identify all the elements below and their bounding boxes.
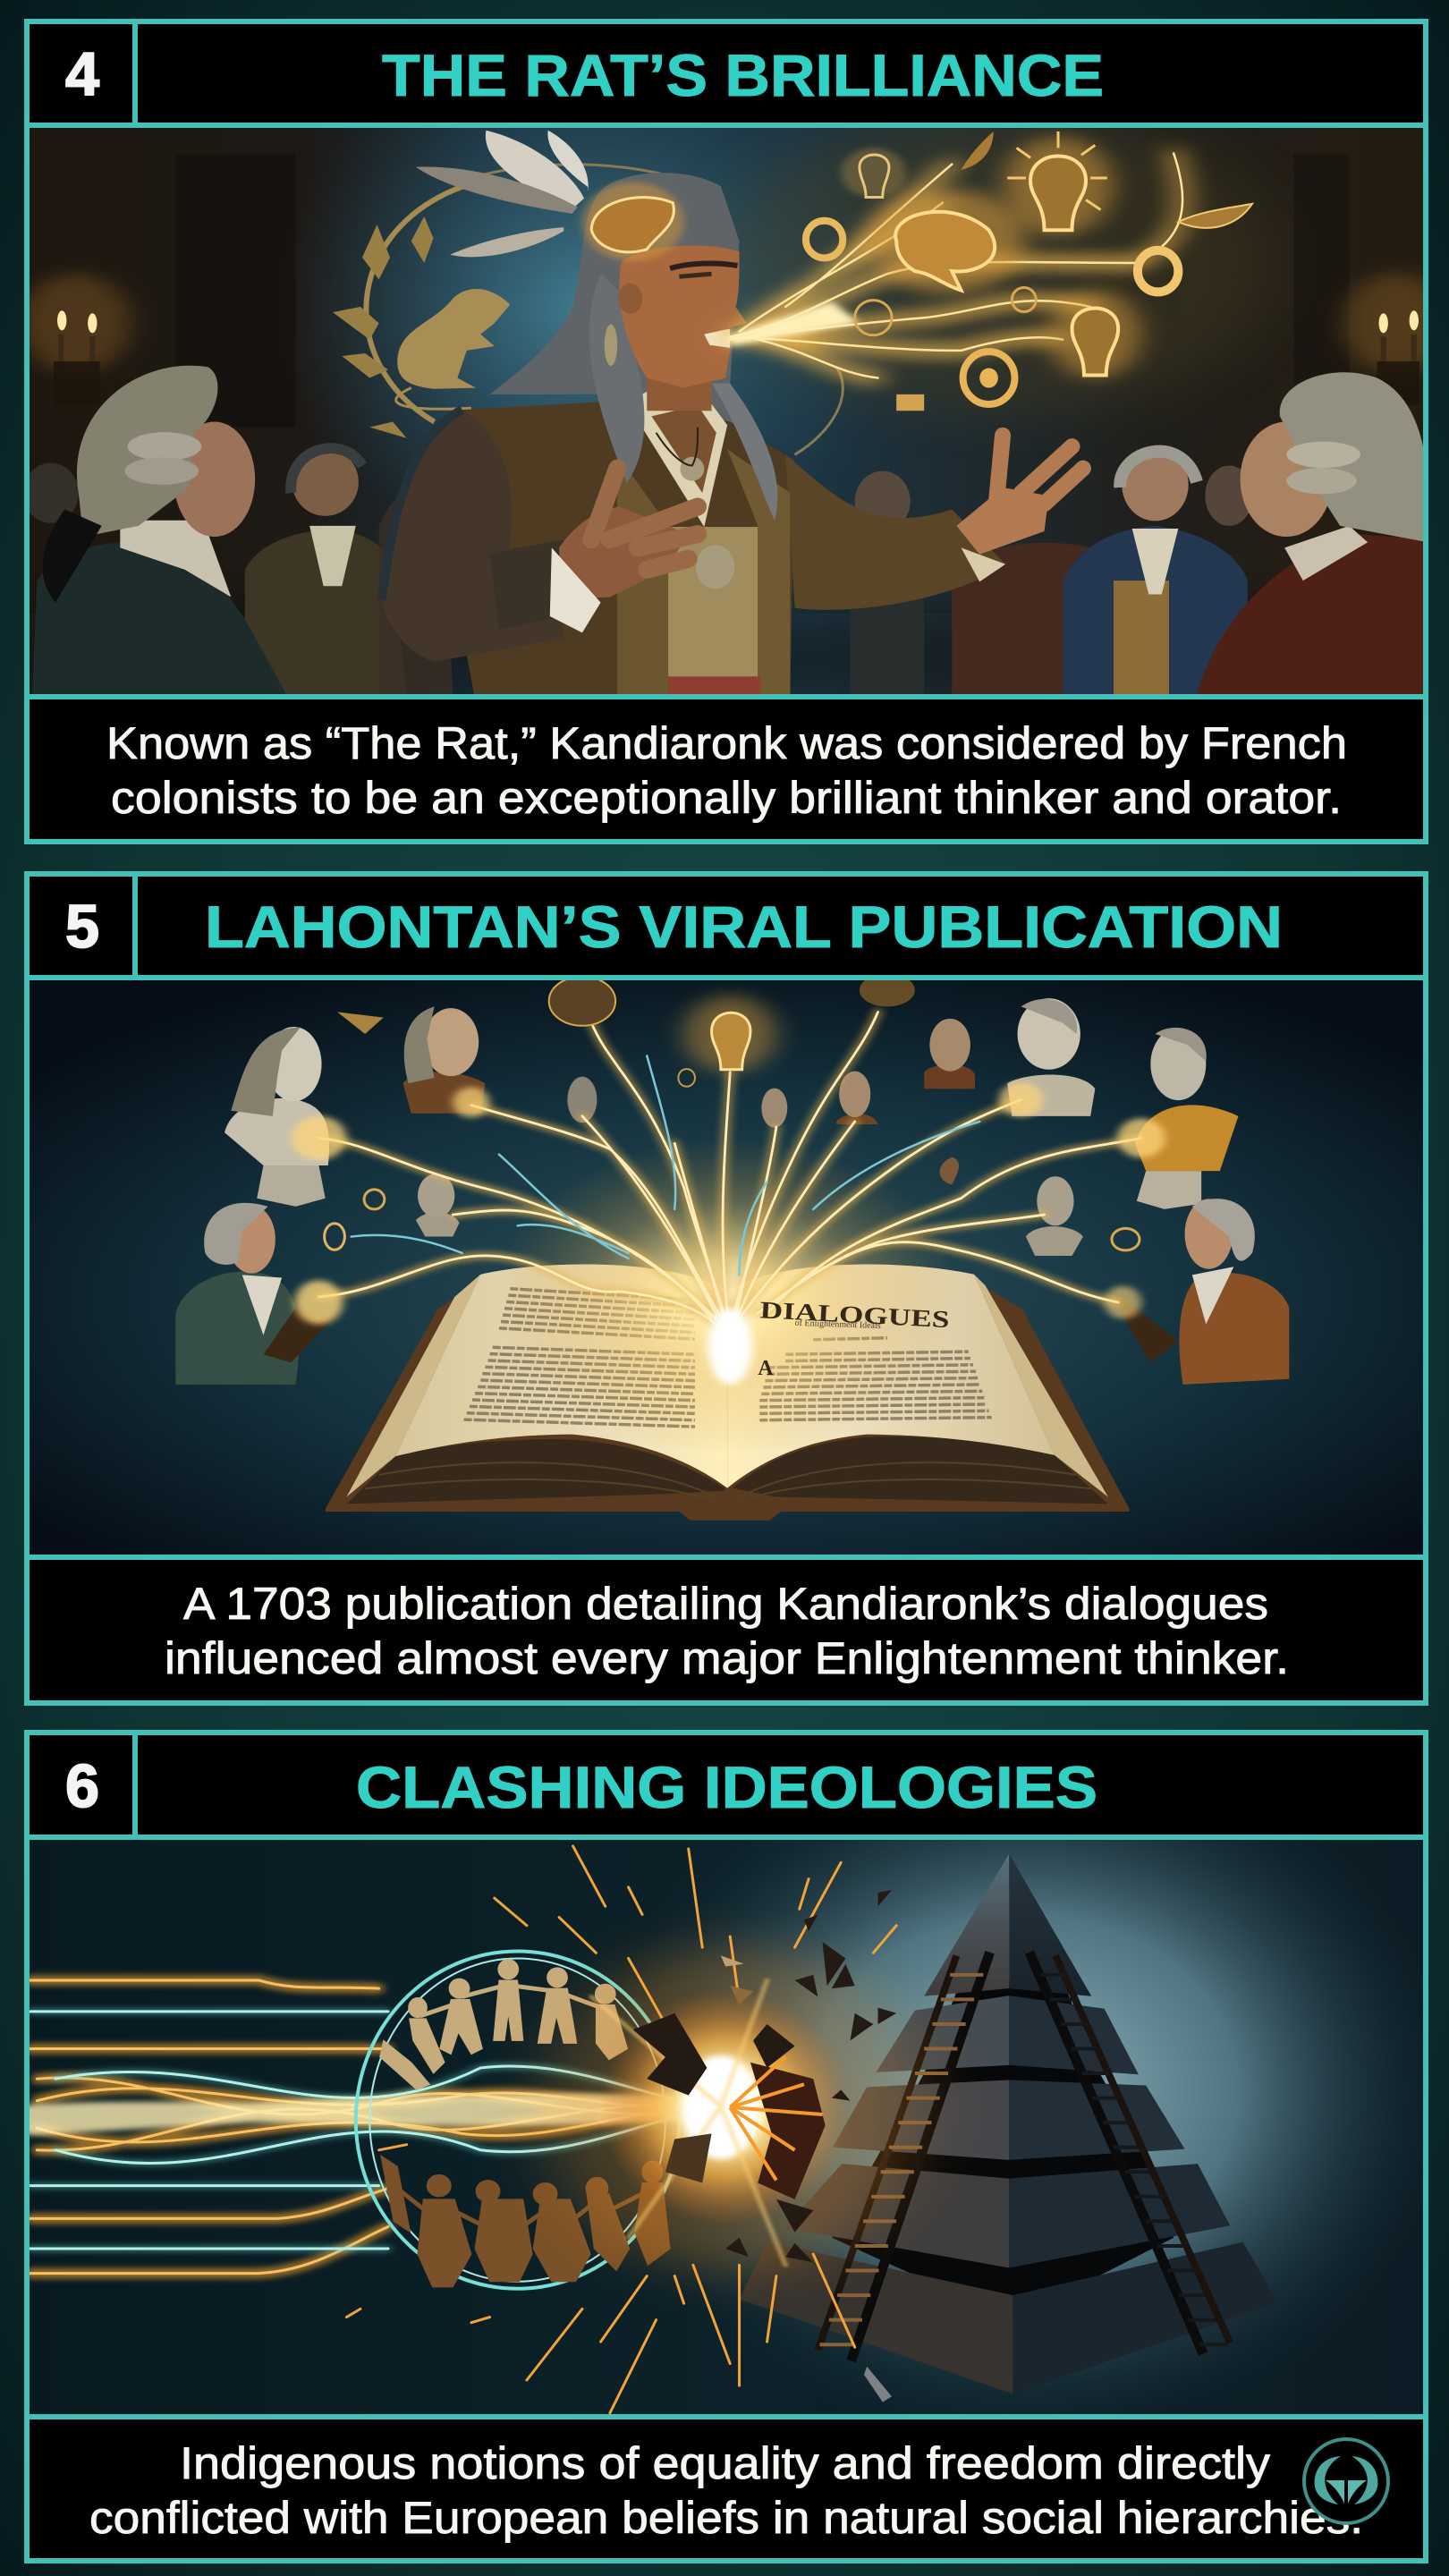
printed lines, right page (759, 1338, 992, 1420)
illustration: Kandiaronk speaking to French colonists (30, 128, 1423, 694)
glowing lines of influence (291, 1012, 1165, 1456)
illustration: energy beams striking stone pyramid (0, 1739, 1449, 2440)
caption: Known as “The Rat,” Kandiaronk was considered by French (106, 718, 1347, 768)
number badge: 5 (65, 893, 99, 961)
caption: A 1703 publication detailing Kandiaronk’s dialogues (183, 1579, 1268, 1629)
heading: LAHONTAN’S VIRAL PUBLICATION (205, 894, 1283, 960)
book (326, 1265, 1130, 1521)
caption: influenced almost every major Enlightenment thinker. (165, 1633, 1289, 1683)
energy beams (30, 1980, 721, 2274)
sparks (346, 1846, 896, 2413)
panel frame (27, 1733, 1426, 2561)
illustration: glowing open book and Enlightenment thinkers: of Enlightenment Ideals (794, 1318, 881, 1331)
illustration: glowing open book and Enlightenment thinkers: A (758, 1357, 774, 1380)
lower figures (381, 2156, 670, 2287)
caption: colonists to be an exceptionally brilliant thinker and orator. (111, 773, 1342, 823)
Kandiaronk (382, 173, 1083, 695)
readers with books (175, 1199, 1289, 1385)
raised hand (956, 487, 1049, 555)
waistcoat and trim (668, 527, 758, 679)
right colonist (1197, 372, 1428, 695)
panel frame (27, 874, 1426, 1703)
explosion (346, 1846, 915, 2413)
number badge: 6 (65, 1752, 99, 1820)
panel: Lahontan's viral publication (0, 874, 1449, 1703)
caption: conflicted with European beliefs in natural social hierarchies. (89, 2493, 1363, 2543)
panel frame (27, 21, 1426, 842)
caption (106, 718, 1347, 823)
face (647, 377, 712, 411)
hair (490, 173, 739, 424)
number badge: 4 (65, 40, 99, 108)
glowing icons: brain, bulbs, gears, target (806, 131, 1252, 411)
panel: the rat's brilliance (0, 21, 1449, 842)
glowing brain on head (582, 182, 684, 261)
panel: clashing ideologies (0, 1733, 1449, 2561)
marble busts and portraits (225, 998, 1238, 1256)
front hair strands (589, 274, 644, 483)
rock shards (633, 1890, 896, 2402)
left colonist (32, 366, 286, 695)
caption (89, 2438, 1363, 2543)
ring of people holding hands (356, 1951, 679, 2289)
caption (165, 1579, 1289, 1683)
printed lines, left page (464, 1289, 695, 1427)
heading: THE RAT’S BRILLIANCE (382, 42, 1104, 108)
upper figures (380, 1960, 628, 2089)
near hand (559, 506, 689, 600)
glowing stream of ideas (725, 153, 1182, 378)
coat (462, 400, 795, 695)
logo badge (1304, 2439, 1388, 2523)
floating bulbs and globes (325, 974, 1140, 1250)
stone pyramid (740, 1853, 1278, 2394)
background colonists (23, 448, 1253, 695)
candles (21, 274, 1449, 405)
illustration: glowing open book and Enlightenment thinkers (0, 968, 1449, 1565)
caption: Indigenous notions of equality and freedom directly (180, 2438, 1270, 2488)
feathers (416, 131, 589, 257)
book title: DIALOGUES (759, 1296, 950, 1333)
ladders (818, 1953, 1230, 2361)
emblem: wreath and rat (333, 165, 843, 454)
heading: CLASHING IDEOLOGIES (356, 1754, 1097, 1820)
